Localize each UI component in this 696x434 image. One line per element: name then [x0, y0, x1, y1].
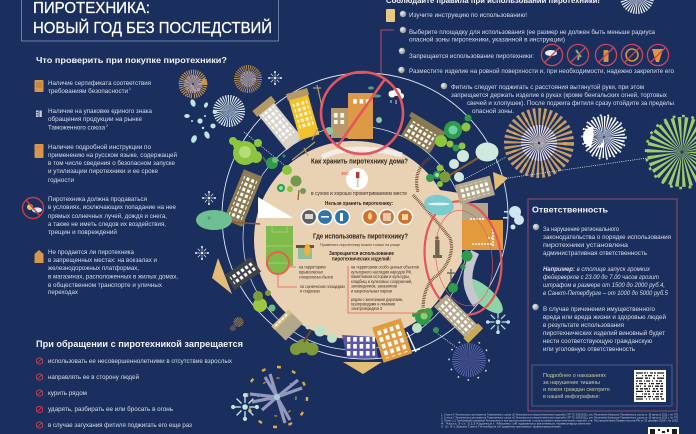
footnotes: 3. Пункт 1.2 Требований пожарной безопасности при распространении и использовании пиротехнических изделий, утв. Постановлением Правительства РФ от 22 декабря 2009 г. № 1052 [441, 420, 679, 422]
upper right building [398, 112, 446, 155]
tan building [331, 108, 348, 138]
text: left column: и пожароопасных объектов [299, 274, 333, 280]
icons: storage bans [301, 209, 413, 225]
small fireworks left [232, 320, 241, 330]
paragraph 2: В случае причинения имущественного [543, 307, 656, 313]
text: storage conditions: трещин и повреждений [48, 229, 117, 236]
purple building [342, 335, 378, 358]
text: forbidden sale places: в общественном транспорте и уличных [48, 283, 162, 289]
tan building bottom left [271, 309, 303, 341]
firework: cyan snowflake right [487, 311, 509, 333]
title box [22, 0, 278, 41]
paragraph 1: пиротехники установлена [543, 243, 629, 249]
text: outdoors only: Применять пиротехнику можно только на улице [320, 243, 400, 247]
paragraph 2 [543, 307, 666, 353]
green bushes [448, 250, 472, 293]
paragraph 2: пиротехнических изделий виновный будет [543, 330, 665, 337]
QR code bottom [648, 427, 679, 434]
text: certificate: Наличие сертификата соответствия [48, 81, 151, 87]
text: storage conditions: в условиях, исключающих попадание на нее [48, 205, 177, 211]
text: instructions: Наличие подробной инструкции по [48, 144, 152, 151]
example [543, 267, 669, 297]
firework: tan top [241, 72, 255, 86]
text: forbidden sale places: железнодорожных платформах, [48, 266, 139, 272]
firework: white top right [628, 0, 646, 6]
text: forbidden sale places: переходах [48, 290, 78, 296]
blue blob right [503, 206, 524, 230]
text: right column: культурного наследия народов РФ, [351, 270, 412, 274]
cross [447, 269, 455, 284]
mint leaf [460, 273, 508, 319]
white mark bottom [407, 332, 420, 352]
text: storage conditions [48, 197, 177, 236]
safety rules [386, 0, 675, 115]
text: single mark: Наличие на упаковке единого знака [48, 109, 153, 115]
heading: where to use: Где использовать пиротехнику? [313, 234, 408, 240]
section heading: what to check: Что проверить при покупке пиротехники? [36, 56, 227, 65]
text: forbidden sale places [48, 250, 178, 296]
white beam to storage icons [258, 197, 293, 218]
QR code [634, 370, 666, 402]
text: storage conditions: а также не иметь следов их воздействия, [48, 221, 166, 228]
text: instructions: в том числе сведения о безопасном запуске [48, 161, 176, 167]
bottom olive tree [290, 330, 318, 356]
mint bushes [306, 324, 337, 343]
forbidden texts: курить рядом [48, 391, 87, 397]
left mint tree [196, 210, 260, 230]
text: single mark: Таможенного союза [48, 126, 106, 132]
example: штрафом в размере от 1500 до 2000 руб.4, [543, 283, 665, 289]
small snowflakes [195, 71, 282, 260]
forbidden list [36, 358, 232, 429]
statue [433, 236, 442, 258]
bottom right green tree [412, 308, 439, 333]
example: Например: в столице запуск громких [543, 267, 651, 273]
section heading: forbidden actions: При обращении с пиротехникой запрещается [36, 339, 243, 349]
paragraph 2: нести соответствующую гражданскую [543, 339, 653, 345]
red connector to step 2 [381, 30, 394, 74]
paragraph 1 [543, 227, 671, 257]
callout: more about penalties [532, 365, 672, 406]
teal leaves [368, 86, 381, 98]
firework: bottom left gold stars [247, 367, 307, 427]
lake and tree on the right of planet [422, 171, 456, 217]
text: instructions: и утилизации пиротехники и ее сроке [48, 169, 159, 175]
callout: more about penalties: за нарушение тишины [543, 380, 600, 386]
example: в Санкт-Петербурге – от 1000 до 5000 руб.5 [543, 291, 669, 297]
text: storage conditions: прямых солнечных лучей, дождя и снега, [48, 213, 167, 220]
footnotes: 1. Статья 4 Технического регламента Таможенного союза «О безопасности пиротехнических изделий» (ТР ТС 006/2011), утв. Решением Комиссии Таможенного союза от 16 августа 2011 г. № 770 [441, 414, 679, 416]
firework: big tan right [513, 117, 565, 169]
footnotes: 2. Статья 7 Технического регламента Таможенного союза «О безопасности пиротехнических изделий» (ТР ТС 006/2011), утв. Решением Комиссии Таможенного союза от 16 августа 2011 г. № 770 [441, 416, 679, 420]
text: left column: и стадионах [300, 288, 321, 294]
icon glyphs in storage bans [305, 212, 408, 221]
text: right column: рядом с железными дорогами, [351, 297, 403, 302]
text: certificate [48, 81, 151, 95]
text: instructions [48, 144, 177, 184]
text: right column: газопроводами и линиями [351, 302, 395, 306]
steps text: опасной зоны пиротехники, указанной в инструкции) [409, 36, 565, 44]
steps text: Изучите инструкцию по использованию! [409, 13, 527, 19]
text: right column: кладбищ и культовых сооружений, [351, 279, 412, 284]
forbidden texts [48, 359, 232, 429]
icon: shop house [34, 250, 44, 263]
steps text: свечей и хлопушек). После поджига фитиля сразу отойдите за пределы [467, 100, 674, 107]
planet [254, 141, 472, 339]
text: instructions: применению на русском языке, содержащей [48, 152, 177, 159]
footnotes: 4. Часть 3 ст. 3.13 Кодекса г. Москвы об административных правонарушениях [441, 422, 592, 426]
forbidden texts: использовать ее несовершеннолетними в отсутствие взрослых [48, 359, 232, 365]
paragraph 1: административная ответственность [543, 251, 647, 257]
paragraph 1: законодательства о порядке использования [543, 235, 671, 241]
subheading: must not store: Нельзя хранить пиротехнику: [325, 201, 393, 207]
text: right column: на территориях особо ценных объектов [351, 264, 420, 270]
heading: how to store: Как хранить пиротехнику дома? [311, 158, 408, 166]
text: dry place: в сухом и хорошо проветриваемом месте [311, 191, 407, 197]
railway [413, 157, 452, 308]
right trees [426, 114, 498, 187]
building supports [292, 85, 322, 160]
steps text: запрещается держать изделие в руках (кроме бенгальских огней, тортовых [451, 92, 667, 99]
firework: cyan snowflake bottom left [232, 394, 258, 420]
forbidden texts: ударять, разбирать ее или бросать в огонь [48, 407, 173, 413]
text: right column: и национальных парков [351, 288, 393, 294]
grey curved road [468, 252, 477, 304]
footnotes [441, 414, 679, 428]
orange building [372, 318, 412, 363]
connector: right column [348, 266, 427, 313]
text: single mark: 2 [106, 124, 108, 128]
balls [532, 224, 539, 310]
rain cloud [388, 88, 404, 104]
right rocket [455, 172, 508, 204]
white snow band on planet top [322, 149, 402, 157]
firework: white right [582, 115, 626, 159]
text: left column [299, 264, 346, 294]
left rocket [212, 257, 261, 294]
icon: no sun and rain [22, 198, 44, 218]
heading: responsibility: Ответственность [532, 204, 608, 214]
paragraph 2: вреда или вреда жизни и здоровью людей [543, 314, 666, 321]
steps text [409, 13, 675, 115]
callout: more about penalties: в нашей инфографике: [543, 393, 600, 400]
red circle: residential area [321, 72, 404, 154]
text: right column: памятников истории и культуры, [351, 274, 410, 279]
firework: tan top left [186, 77, 200, 91]
lower right tower [433, 293, 483, 343]
white building [252, 96, 304, 151]
text: certificate: 1 [129, 87, 131, 91]
subheading: forbidden use: пиротехнических изделий: [332, 256, 391, 262]
panel: storage at home [301, 158, 413, 225]
left tree: big green [229, 137, 286, 169]
red ellipse: monuments [417, 196, 509, 320]
steps text: Разместите изделие на ровной поверхности и, при необходимости, надежно закрепите его [409, 68, 675, 75]
forbidden texts: в случае загухания фитиля поджигать его еще раз [48, 423, 192, 429]
icon: house with fire [296, 243, 314, 259]
panel: where to use [278, 234, 427, 313]
paragraph 2: или уголовную ответственность [543, 347, 635, 353]
text: single mark: обращения продукции на рынке [48, 117, 143, 123]
text: single mark [48, 109, 153, 132]
text: storage conditions: Пиротехника должна продаваться [48, 197, 147, 203]
callout: more about penalties: Подробнее о наказаниях [543, 373, 606, 379]
icon: EAC mark [36, 110, 42, 117]
text: forbidden sale places: в магазинах, расположенных в жилых домах, [48, 274, 178, 280]
callout: more about penalties: и покоя граждан смотрите [543, 387, 610, 393]
steps text: опасной зоны. [472, 108, 514, 115]
forbidden texts: направлять ее в сторону людей [48, 374, 139, 381]
orange monument building [462, 203, 503, 250]
bottom left olive tree [253, 290, 276, 312]
tan rocket bottom [343, 362, 382, 374]
firework: green right [646, 116, 696, 188]
steps text: Выберите площадку для использования (ее размер не должен быть меньше радиуса [409, 30, 656, 36]
text: right column: электропередачи 3 [351, 306, 382, 311]
icon: certificate [34, 80, 44, 92]
yellow building [286, 88, 320, 140]
left tower building [224, 169, 262, 227]
steps text: Фитиль следует поджигать с расстояния вытянутой руки, при этом [451, 84, 644, 91]
text: forbidden sale places: в запрещенных местах: на вокзалах и [48, 258, 157, 264]
firework: navy dotted [449, 340, 489, 380]
text: right column: заповедников, заказников [351, 284, 398, 288]
text: right column [351, 264, 420, 311]
panel: responsibility [528, 199, 677, 411]
planet top left trees [277, 165, 306, 200]
example: фейерверков с 23.00 до 7.00 часов грозит [543, 274, 659, 281]
paragraph 1: За нарушение регионального [543, 227, 620, 233]
text: left column: на территориях [299, 264, 327, 270]
icons: weather bans [541, 44, 669, 66]
connector: left column [278, 267, 297, 287]
firework: white-blue burst [221, 103, 237, 119]
planet orbit rings [222, 73, 508, 359]
icon: instruction booklet [386, 9, 395, 22]
text: left column: на сценических площадках [300, 284, 346, 289]
orange building [348, 93, 373, 139]
subheading: forbidden use: Запрещается использование [329, 251, 394, 257]
green bush [325, 117, 382, 135]
step balls [398, 11, 447, 89]
icon: thermometer: 30С [341, 171, 350, 176]
firework: oval dots [184, 99, 217, 144]
check list [22, 80, 178, 296]
icon: instructions [34, 144, 44, 158]
steps text: Запрещается использование пиротехники: [409, 54, 534, 60]
stadium field [266, 226, 293, 274]
subheading: forbidden use [329, 251, 394, 262]
text: instructions: годности [48, 178, 74, 184]
title box: НОВЫЙ ГОД БЕЗ ПОСЛЕДСТВИЙ [33, 19, 272, 37]
text: forbidden sale places: Не продается ли пиротехника [48, 250, 135, 256]
footnotes: 5. Ст. 8-1 Закона Санкт-Петербурга об административных правонарушениях [441, 426, 562, 428]
dotted rocket trails [244, 132, 647, 348]
title box: ПИРОТЕХНИКА: [33, 0, 150, 17]
paragraph 2: в результате использования [543, 323, 624, 329]
forbidden icons [36, 358, 43, 428]
text: certificate: требованиям безопасности [48, 89, 128, 95]
text: left column: взрывоопасных [299, 270, 324, 274]
